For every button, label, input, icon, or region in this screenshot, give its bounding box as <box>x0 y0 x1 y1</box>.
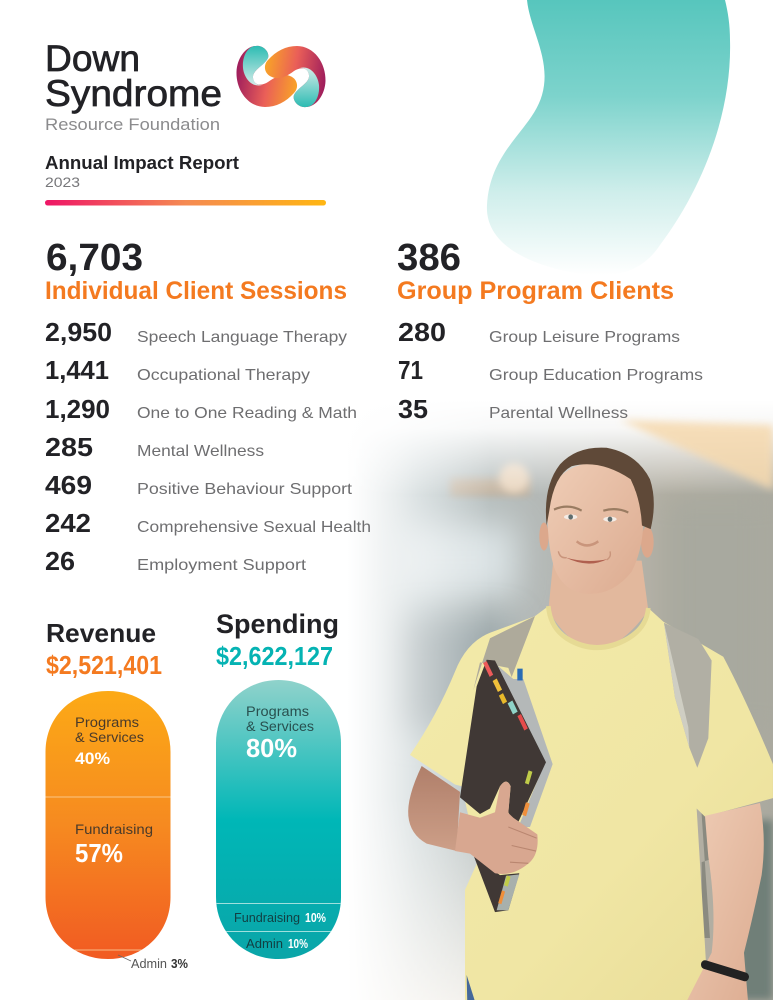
list: group programs: Parental Wellness <box>489 405 628 422</box>
list: group programs: 35 <box>398 394 428 424</box>
head <box>548 463 643 594</box>
list: individual sessions: Employment Support <box>137 557 307 574</box>
decorative teal blob <box>487 0 730 275</box>
hand over book <box>455 782 538 874</box>
report title <box>45 153 239 190</box>
spending: fundraising 10%: Fundraising <box>234 911 300 925</box>
spending heading: Spending <box>216 609 339 639</box>
revenue: admin 3% callout: 3% <box>171 957 188 971</box>
left backpack strap <box>473 616 535 690</box>
right arm <box>685 803 764 1000</box>
person <box>408 448 773 1000</box>
spending pill chart <box>216 680 341 960</box>
logo mark <box>236 46 326 107</box>
list: group programs: Group Education Programs <box>489 367 703 384</box>
revenue: fundraising 57%: Fundraising <box>75 822 153 837</box>
logo wordmark <box>45 38 222 134</box>
lower right strap <box>702 814 710 938</box>
spending heading: $2,622,127 <box>216 641 333 671</box>
list: individual sessions: Speech Language Therapy <box>137 329 347 346</box>
list: group programs <box>398 317 703 424</box>
spending: fundraising 10%: 10% <box>305 911 326 925</box>
report title: 2023 <box>45 174 80 190</box>
spending: programs and services 80%: Programs <box>246 704 309 719</box>
spending: admin 10% <box>246 937 308 951</box>
revenue heading: Revenue <box>46 618 156 648</box>
hair <box>546 448 654 529</box>
logo swoosh: lower left <box>236 46 297 107</box>
list: individual sessions: Comprehensive Sexual Health <box>137 519 371 536</box>
eyes <box>564 514 577 520</box>
book tabs <box>483 661 493 677</box>
photo: student with backpack and book <box>368 414 773 1000</box>
revenue pill chart <box>45 690 171 960</box>
spending: admin 10%: Admin <box>246 937 283 951</box>
logo wordmark: Resource Foundation <box>45 115 220 134</box>
list: individual sessions: 1,290 <box>45 394 110 424</box>
logo wordmark: Syndrome <box>45 73 222 114</box>
heading: group program clients: Group Program Clients <box>397 277 674 305</box>
revenue heading: $2,521,401 <box>46 650 162 680</box>
list: group programs: Group Leisure Programs <box>489 329 680 346</box>
list: individual sessions: Positive Behaviour Support <box>137 481 353 498</box>
nose <box>577 541 598 545</box>
jeans hint <box>466 975 474 1000</box>
heading: individual client sessions: 6,703 <box>46 237 143 279</box>
mouth <box>566 558 607 564</box>
spending heading <box>216 609 339 671</box>
list: individual sessions: 242 <box>45 508 91 538</box>
revenue heading <box>46 618 162 680</box>
list: individual sessions: 2,950 <box>45 317 112 347</box>
spending: programs and services 80% <box>246 704 314 763</box>
list: individual sessions: 469 <box>45 470 92 500</box>
right backpack strap <box>664 623 712 768</box>
report title: Annual Impact Report <box>45 153 239 173</box>
left arm <box>408 766 460 851</box>
list: group programs: 71 <box>398 355 423 385</box>
list: individual sessions: One to One Reading & Math <box>137 405 357 422</box>
spending: admin 10%: 10% <box>288 937 308 951</box>
list: individual sessions: Mental Wellness <box>137 443 264 460</box>
gradient rule <box>45 200 326 206</box>
heading: individual client sessions <box>45 237 347 305</box>
logo wordmark: Down <box>45 38 140 79</box>
list: individual sessions: 285 <box>45 432 93 462</box>
book: dark cover <box>460 660 546 827</box>
heading: group program clients: 386 <box>397 237 461 279</box>
revenue: admin 3% callout: Admin <box>131 957 167 971</box>
ears <box>539 522 549 551</box>
revenue: admin 3% callout <box>118 955 188 971</box>
revenue: programs and services 40%: 40% <box>75 749 110 768</box>
book: page edge <box>498 666 553 827</box>
list: group programs: 280 <box>398 317 446 347</box>
list: individual sessions: 1,441 <box>45 355 109 385</box>
list: individual sessions <box>45 317 371 576</box>
revenue: programs and services 40%: Programs <box>75 715 139 730</box>
list: individual sessions: Occupational Therapy <box>137 367 310 384</box>
revenue: fundraising 57% <box>75 822 153 868</box>
spending: programs and services 80%: & Services <box>246 719 314 734</box>
photo background: blurred corridor <box>368 414 773 1000</box>
neck <box>548 561 648 648</box>
revenue: programs and services 40% <box>75 715 144 768</box>
revenue: programs and services 40%: & Services <box>75 730 144 745</box>
logo swoosh: upper right <box>265 46 326 107</box>
brows <box>554 507 628 512</box>
heading: individual client sessions: Individual Client Sessions <box>45 277 347 305</box>
shirt collar <box>548 606 648 648</box>
revenue: fundraising 57%: 57% <box>75 838 123 868</box>
t-shirt <box>410 606 773 1000</box>
spending: programs and services 80%: 80% <box>246 733 297 763</box>
list: individual sessions: 26 <box>45 546 75 576</box>
book: lower cover <box>473 855 519 912</box>
heading: group program clients <box>397 237 674 305</box>
bracelet <box>705 965 745 977</box>
